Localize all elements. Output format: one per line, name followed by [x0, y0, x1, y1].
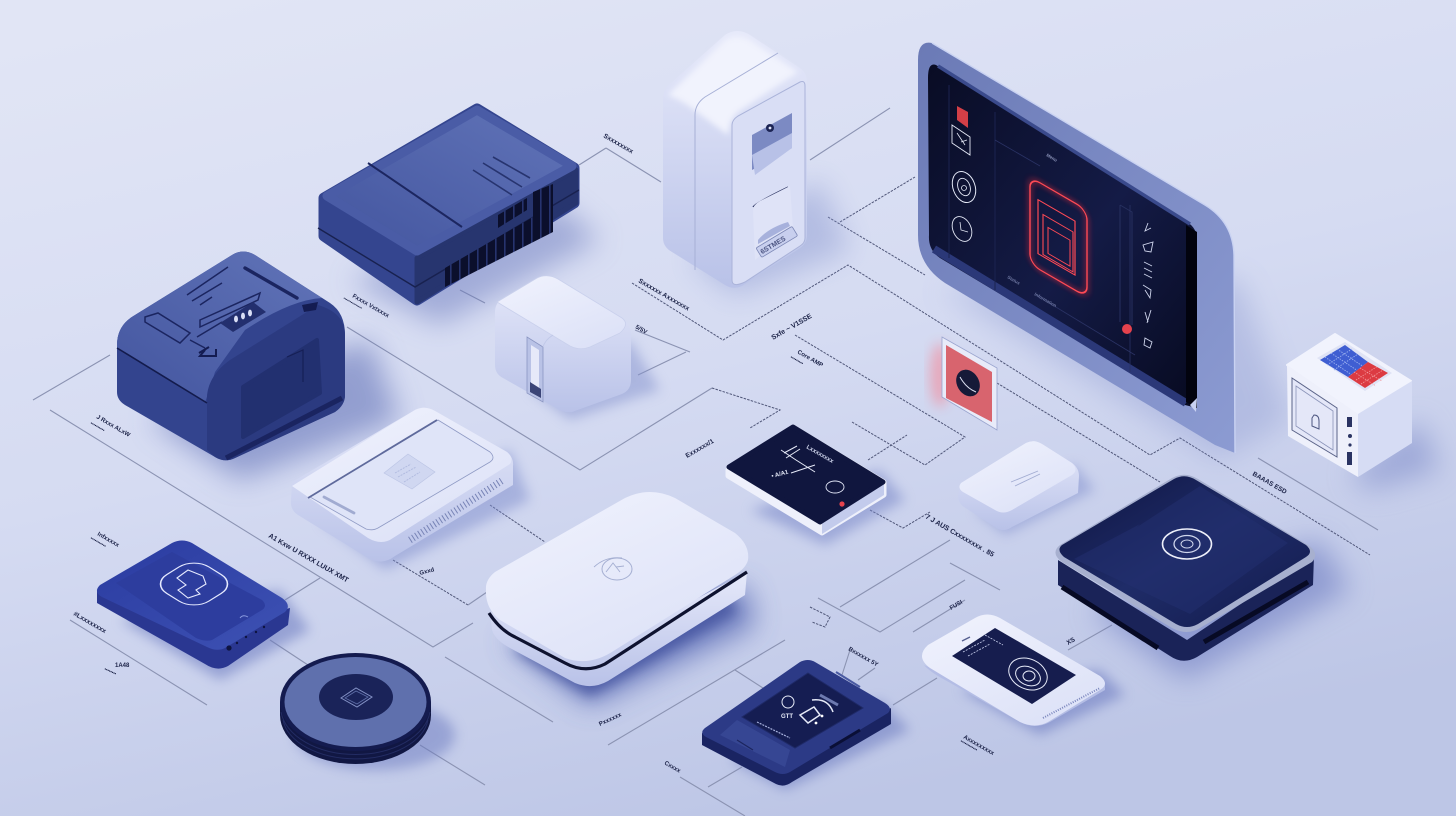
labels: •••••••••••	[90, 536, 107, 549]
labels: Cxxxx	[663, 761, 682, 775]
device: cube sensor	[1287, 334, 1440, 490]
labels: BAAAS ESD	[1251, 471, 1288, 496]
device: white phone	[922, 614, 1125, 735]
labels: ••••••••••	[90, 421, 106, 433]
labels: Infxxxxx	[96, 532, 120, 549]
device: tablet display: Status	[1006, 275, 1021, 286]
labels: •••••••••••••••	[342, 296, 364, 311]
labels	[72, 133, 1288, 775]
device: tablet display: Information	[1034, 292, 1058, 308]
labels: #Lxxxxxxxx	[72, 611, 107, 635]
labels: Fxxxx Vxtxxxx	[351, 294, 390, 320]
labels: Sxxxxxxxx	[602, 133, 635, 156]
device: blue card	[97, 540, 310, 680]
labels: Pxxxxxx	[598, 712, 623, 728]
labels: •••••••••	[790, 355, 805, 366]
labels: 5/5V	[634, 325, 648, 336]
labels: XS	[1066, 636, 1077, 647]
device: round disc	[280, 653, 455, 770]
labels: J Rxxx ALxW	[95, 415, 131, 439]
device: red square sensor	[930, 337, 997, 430]
labels: Bxxxxxx 5Y	[847, 647, 879, 668]
labels: Sxfe ~ V1SSE	[770, 313, 814, 342]
labels: Exxxxxx/1	[684, 438, 716, 460]
labels: Axxxxxxxxx	[962, 735, 995, 757]
device: tall white box: 6STMES	[760, 235, 787, 256]
labels: A1 Kxw U RXXX LUUX XMT	[267, 533, 350, 585]
device: small dark touch panel: Lxxxxxxxx	[805, 445, 835, 465]
device: dark router	[318, 109, 600, 325]
labels: 7 J AUS Cxxxxxxxx . 85	[924, 514, 995, 559]
device: navy handheld	[702, 660, 910, 790]
device: tablet display	[918, 43, 1290, 460]
labels: ••••••••	[104, 666, 117, 676]
labels: FUSI	[949, 600, 964, 612]
device: tall white box	[663, 31, 850, 295]
device: navy handheld: GTT	[781, 714, 793, 720]
labels: ••••••••••••	[960, 739, 979, 753]
device: small dark touch panel	[728, 427, 905, 545]
device: white flat router	[291, 408, 530, 570]
labels: 1A48	[115, 663, 130, 669]
labels: Sxxxxxx Axxxxxxx	[637, 278, 691, 313]
device: white pill module	[958, 441, 1095, 535]
device: small white block	[495, 276, 660, 420]
labels: Gxxd	[419, 567, 435, 577]
device: dark printer	[117, 252, 400, 480]
device: dark wireless tablet	[1055, 475, 1350, 680]
device: small dark touch panel: • A/A1	[771, 470, 790, 480]
labels: Core AMP	[796, 350, 824, 369]
device: large white hub	[486, 492, 755, 705]
device: tablet display: Menu	[1046, 153, 1058, 163]
